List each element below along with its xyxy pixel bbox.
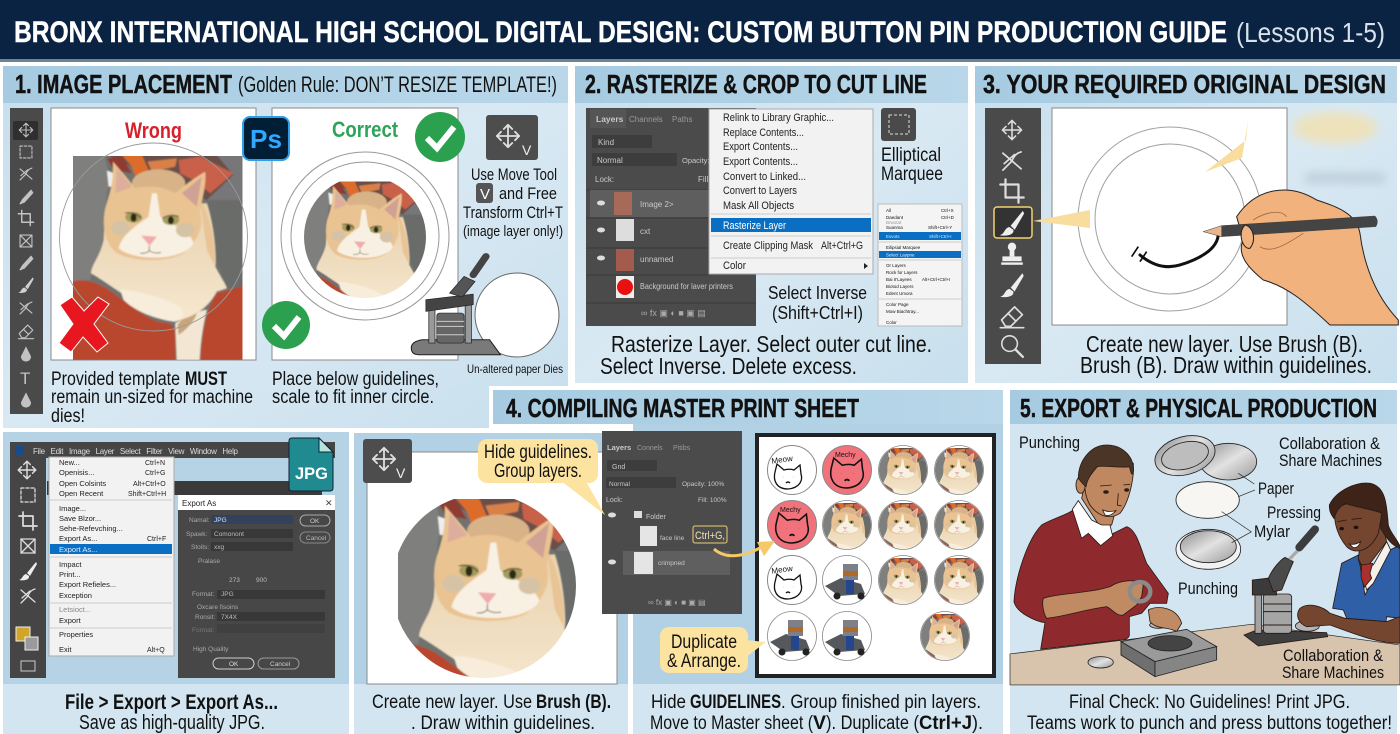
icon: move tool: [486, 115, 538, 160]
file menu: Export As...: [59, 534, 97, 543]
caption: step 4 right: GUIDELINES: [690, 692, 781, 713]
caption: step 4 left: [372, 692, 611, 734]
layers panel: Background for laver printers: [640, 282, 733, 291]
select menu: Shift+Ctrl+Y: [928, 225, 952, 230]
component discs: [1150, 429, 1257, 569]
export dialog: ✕: [325, 498, 333, 508]
layers panel: Normal: [597, 156, 623, 165]
file menu: Impact: [59, 560, 82, 569]
icon: photoshop logo: [243, 117, 289, 160]
context menu: Color: [723, 260, 746, 272]
caption: step 5: Final Check: No Guidelines! Print JPG.: [1069, 692, 1350, 713]
export dialog: 900: [256, 577, 267, 584]
die block: [1088, 629, 1217, 677]
select menu: Alt+Ctrl+Ctrl+I: [922, 277, 950, 282]
select menu: Color: [886, 320, 897, 325]
icon: check bottom: [262, 301, 310, 349]
caption: step 2: Rasterize Layer. Select outer cut line.: [611, 331, 932, 357]
caption: step 4 right: Ctrl+J: [919, 713, 972, 734]
file menu: Properties: [59, 630, 93, 639]
layers panel: Folder: [646, 514, 667, 521]
file menu: Exit: [59, 645, 72, 654]
heading: step 4: 4. COMPILING MASTER PRINT SHEET: [506, 393, 859, 423]
export dialog: 273: [229, 577, 240, 584]
export dialog: Pralase: [198, 558, 220, 565]
layers panel: [602, 431, 742, 614]
context menu: Rasterize Layer: [723, 220, 786, 232]
caption: step 4 right: ). Duplicate (: [826, 713, 920, 734]
file menu: Open Colsints: [59, 479, 106, 488]
layers panel: Kind: [598, 138, 614, 147]
export dialog: Cancel: [306, 535, 327, 542]
icon: move tool: [363, 439, 412, 483]
export dialog: xxg: [214, 544, 224, 551]
file menu: Export: [59, 616, 82, 625]
label: pressing: Pressing: [1267, 503, 1321, 522]
callout: hide guidelines: [478, 439, 605, 515]
heading: step 1: 1. IMAGE PLACEMENT: [15, 69, 232, 99]
caption: correct: [272, 369, 439, 408]
export dialog: Comonont: [214, 531, 244, 538]
layers panel: Image 2>: [640, 200, 674, 209]
heading: step 2: 2. RASTERIZE & CROP TO CUT LINE: [585, 69, 927, 99]
caption: export: [65, 691, 278, 734]
context menu: Relink to Library Graphic...: [723, 112, 834, 124]
pin row 1: Meow: [771, 454, 794, 466]
select menu: All: [886, 208, 891, 213]
export dialog: OK: [310, 518, 320, 525]
icon: photoshop logo: Ps: [250, 124, 282, 154]
illustration: girl pressing: [1244, 483, 1400, 646]
file menu: Ctrl+N: [145, 460, 165, 467]
correct example: [272, 108, 458, 360]
select menu: Edent Umora: [886, 291, 913, 296]
file menu: Sehe-Refevching...: [59, 524, 123, 533]
layers panel: ∞ fx ▣ ◐ ■ ▣ ▤: [648, 598, 706, 607]
photoshop window: [10, 442, 335, 678]
layers panel: Layers: [607, 443, 631, 452]
layers panel: crimpned: [658, 560, 685, 567]
file menu: Ctrl+G: [145, 470, 165, 477]
panel: 4 compiling master print sheet: [354, 386, 1006, 734]
heading: step 1: (Golden Rule: DON’T RESIZE TEMPLATE!): [238, 72, 557, 97]
export dialog: OK: [229, 661, 239, 668]
select menu: Ctrl+X: [941, 208, 954, 213]
move tool note: [463, 165, 563, 240]
move tool note: Use Move Tool: [471, 165, 557, 184]
export dialog: [178, 495, 335, 678]
layers panel: Opacity:: [682, 156, 710, 165]
export dialog: Format:: [192, 627, 215, 634]
layers panel: Lock:: [606, 497, 623, 504]
context menu: Convert to Layers: [723, 185, 797, 197]
select menu: Color Page: [886, 302, 909, 307]
file menu: Exception: [59, 591, 92, 600]
elliptical marquee label: [881, 145, 943, 185]
label: collaboration bottom: [1282, 646, 1384, 682]
layers panel: face line: [660, 535, 685, 542]
export dialog: JPG: [221, 591, 234, 598]
photoshop window: File Edit Image Layer Select Filter View Window Help: [33, 447, 239, 456]
table: [1010, 624, 1400, 685]
context menu: Export Contents...: [723, 141, 798, 153]
caption: step 4 right: [650, 692, 983, 734]
file menu: Letsioct...: [59, 605, 91, 614]
caption: wrong: dies!: [51, 406, 85, 427]
die label: Un-altered paper Dies: [467, 362, 563, 376]
select menu: Select Laypne: [886, 252, 915, 258]
context menu: Create Clipping Mask: [723, 240, 813, 252]
caption: step 3: [1080, 331, 1372, 378]
select menu: Suanma: [886, 225, 903, 230]
canvas with guidelines: [1052, 108, 1287, 325]
caption: wrong: MUST: [185, 369, 227, 390]
title banner: [0, 0, 1400, 62]
caption: step 5: [1027, 692, 1392, 734]
context menu: Convert to Linked...: [723, 171, 806, 183]
file menu: Export As...: [59, 545, 97, 554]
select menu: Mow Biachtray...: [886, 309, 919, 314]
label: mylar: Mylar: [1254, 522, 1290, 541]
illustration: boy punching: [1014, 445, 1182, 649]
pin row 2: [768, 500, 986, 565]
layers panel: Fill:: [698, 175, 710, 184]
export dialog: Cancel: [270, 661, 291, 668]
export dialog: JPG: [214, 517, 227, 524]
move tool note: Transform Ctrl+T: [463, 203, 563, 222]
file menu: Shift+Ctrl+H: [128, 491, 166, 498]
wrong example: [51, 108, 256, 363]
layers panel: Paths: [672, 115, 692, 124]
export dialog: 7X4X: [221, 614, 238, 621]
highlight beam: [1033, 210, 1090, 228]
elliptical marquee label: Elliptical: [881, 145, 941, 166]
layers panel: Lock:: [595, 175, 614, 184]
context menu: Alt+Ctrl+G: [821, 240, 863, 252]
layers panel: Gnd: [612, 464, 625, 471]
arrow head: [757, 541, 775, 556]
label: collaboration top: Collaboration &: [1279, 434, 1381, 453]
file menu: Ctrl+F: [147, 536, 166, 543]
icon: jpg file: JPG: [295, 464, 328, 483]
toolbar: [985, 108, 1041, 364]
label: punching: Punching: [1019, 433, 1080, 452]
caption: step 4 right: Hide: [651, 692, 686, 713]
caption: step 2: Select Inverse. Delete excess.: [600, 353, 857, 379]
file menu: Open Recent: [59, 489, 104, 498]
move tool note: and Free: [499, 184, 557, 203]
sub-panel: design on layer: [354, 433, 628, 734]
caption: step 4 right: ).: [972, 713, 983, 734]
select menu: Daedant: [886, 215, 904, 220]
caption: correct: scale to fit inner circle.: [272, 387, 434, 408]
layers panel: Pitibs: [673, 445, 691, 452]
label: collaboration top: [1279, 434, 1382, 470]
select inverse label: [768, 283, 867, 323]
export dialog: Ronsit:: [195, 614, 215, 621]
file menu: Alt+Q: [147, 647, 165, 654]
toolbar: T: [20, 369, 30, 388]
select menu: Biotod Layers: [886, 284, 914, 289]
caption: step 4 left: Brush (B).: [536, 692, 611, 713]
icon: move tool: V: [522, 142, 532, 158]
select menu: Eilipsial Marquee: [886, 245, 921, 250]
select inverse label: (Shift+Ctrl+I): [772, 303, 863, 323]
file menu: Save Blzor...: [59, 514, 101, 523]
arrow: layers to sheet: [714, 548, 760, 556]
select menu: Brwotat: [886, 220, 902, 225]
caption: wrong: remain un-sized for machine: [51, 387, 253, 408]
file menu: Alt+Ctrl+O: [133, 481, 166, 488]
layers panel: cxt: [640, 227, 651, 236]
context menu: Mask All Objects: [723, 200, 794, 212]
caption: export: Save as high-quality JPG.: [79, 712, 265, 734]
select menu: Or Layers: [886, 263, 907, 268]
layers panel: ∞ fx ▣ ◐ ■ ▣ ▤: [641, 308, 706, 318]
select menu: [878, 204, 962, 326]
pin row 4: [768, 612, 972, 676]
select menu: Rock for Layers: [886, 270, 918, 275]
paper die circle: [475, 273, 559, 357]
callout: hide guidelines: Hide guidelines.: [484, 442, 592, 463]
file menu: [49, 457, 174, 656]
illustration: hand drawing: [1132, 190, 1398, 325]
panel: 5 export and physical production: [1010, 390, 1400, 734]
sub-panel: master sheet: [602, 424, 1003, 734]
export dialog: Namal:: [189, 517, 210, 524]
caption: step 4 left: . Draw within guidelines.: [411, 713, 595, 734]
callout: hide guidelines: Group layers.: [494, 461, 582, 482]
context menu: [709, 109, 873, 274]
select menu: Ctrl+D: [941, 215, 955, 220]
caption: step 4 right: V: [813, 713, 826, 734]
export dialog: Format:: [192, 591, 215, 598]
select inverse label: Select Inverse: [768, 283, 867, 303]
wrong example: Wrong: [125, 118, 182, 143]
caption: export: File > Export > Export As...: [65, 691, 278, 714]
label: paper: Paper: [1258, 479, 1294, 498]
file menu: Openisis...: [59, 468, 94, 477]
icon: move tool: V: [396, 465, 406, 481]
layers panel: Connels: [637, 445, 663, 452]
correct example: Correct: [332, 117, 399, 142]
file menu: Print...: [59, 570, 81, 579]
file menu: Export Refieles...: [59, 580, 116, 589]
icon: red x: [59, 297, 109, 352]
callout: duplicate: & Arrange.: [667, 651, 741, 672]
illustration: machines and discs: [1088, 429, 1257, 677]
panel: export as: [3, 432, 349, 734]
export dialog: Spawk:: [186, 531, 208, 538]
shortcut badge: Ctrl+G,: [695, 530, 725, 542]
callout: duplicate: Duplicate: [671, 632, 737, 653]
layers panel: Channels: [629, 115, 663, 124]
toolbar: [10, 108, 43, 414]
file menu: New...: [59, 458, 80, 467]
caption: step 2: [600, 331, 932, 379]
caption: step 4 left: Create new layer. Use: [372, 692, 532, 713]
layers panel: Fill: 100%: [698, 497, 727, 504]
pin row 1: [768, 446, 986, 510]
shortcut badge: [693, 526, 727, 543]
elliptical marquee label: Marquee: [881, 164, 943, 185]
context menu: Replace Contents...: [723, 127, 804, 139]
panel: 2 rasterize and crop: [575, 66, 968, 383]
caption: step 4 right: Move to Master sheet (: [650, 713, 814, 734]
caption: wrong: Provided template: [51, 369, 180, 390]
icon: button press: [411, 256, 501, 355]
move tool note: (image layer only!): [463, 223, 563, 240]
panel: 3 required original design: [975, 66, 1398, 383]
pin row 3: Meow: [771, 564, 794, 576]
faded glow: [1293, 112, 1385, 182]
caption: correct: Place below guidelines,: [272, 369, 439, 390]
icon: check top: [415, 112, 465, 162]
export dialog: Oxcare fisoins: [197, 604, 239, 611]
export dialog: Export As: [182, 499, 216, 508]
label: collaboration bottom: Collaboration &: [1283, 646, 1384, 665]
heading: step 1: [15, 69, 557, 99]
context menu: Export Contents...: [723, 156, 798, 168]
layers panel: unnamed: [640, 255, 673, 264]
pin row 3: [768, 556, 986, 620]
layers panel: [586, 108, 756, 326]
layers panel: Normal: [609, 481, 631, 488]
label: punching centre: Punching: [1178, 579, 1238, 598]
select menu: Shift+Ctrl+I: [929, 234, 952, 239]
label: collaboration top: Share Machines: [1279, 451, 1382, 470]
pin row 1: Mechy: [835, 452, 856, 459]
caption: step 4 right: . Group finished pin layers.: [781, 692, 981, 713]
callout: duplicate: [660, 627, 766, 673]
panel: 1 image placement: [3, 66, 568, 428]
file menu: Image...: [59, 504, 86, 513]
export dialog: Stoits:: [191, 544, 209, 551]
icon: jpg file: [289, 438, 333, 491]
layers panel: Layers: [596, 114, 624, 124]
caption: wrong: [51, 369, 253, 427]
select menu: Bai II'Layees: [886, 277, 912, 282]
select menu: Esvots: [886, 234, 900, 239]
move tool note: V: [480, 186, 490, 203]
icon: elliptical marquee: [881, 108, 916, 141]
export dialog: High Quality: [193, 646, 229, 653]
print sheet: [757, 435, 994, 676]
highlight beam upper: [1205, 120, 1248, 172]
layers panel: Opacity: 100%: [682, 481, 724, 488]
pin row 2: Mechy: [780, 507, 801, 514]
